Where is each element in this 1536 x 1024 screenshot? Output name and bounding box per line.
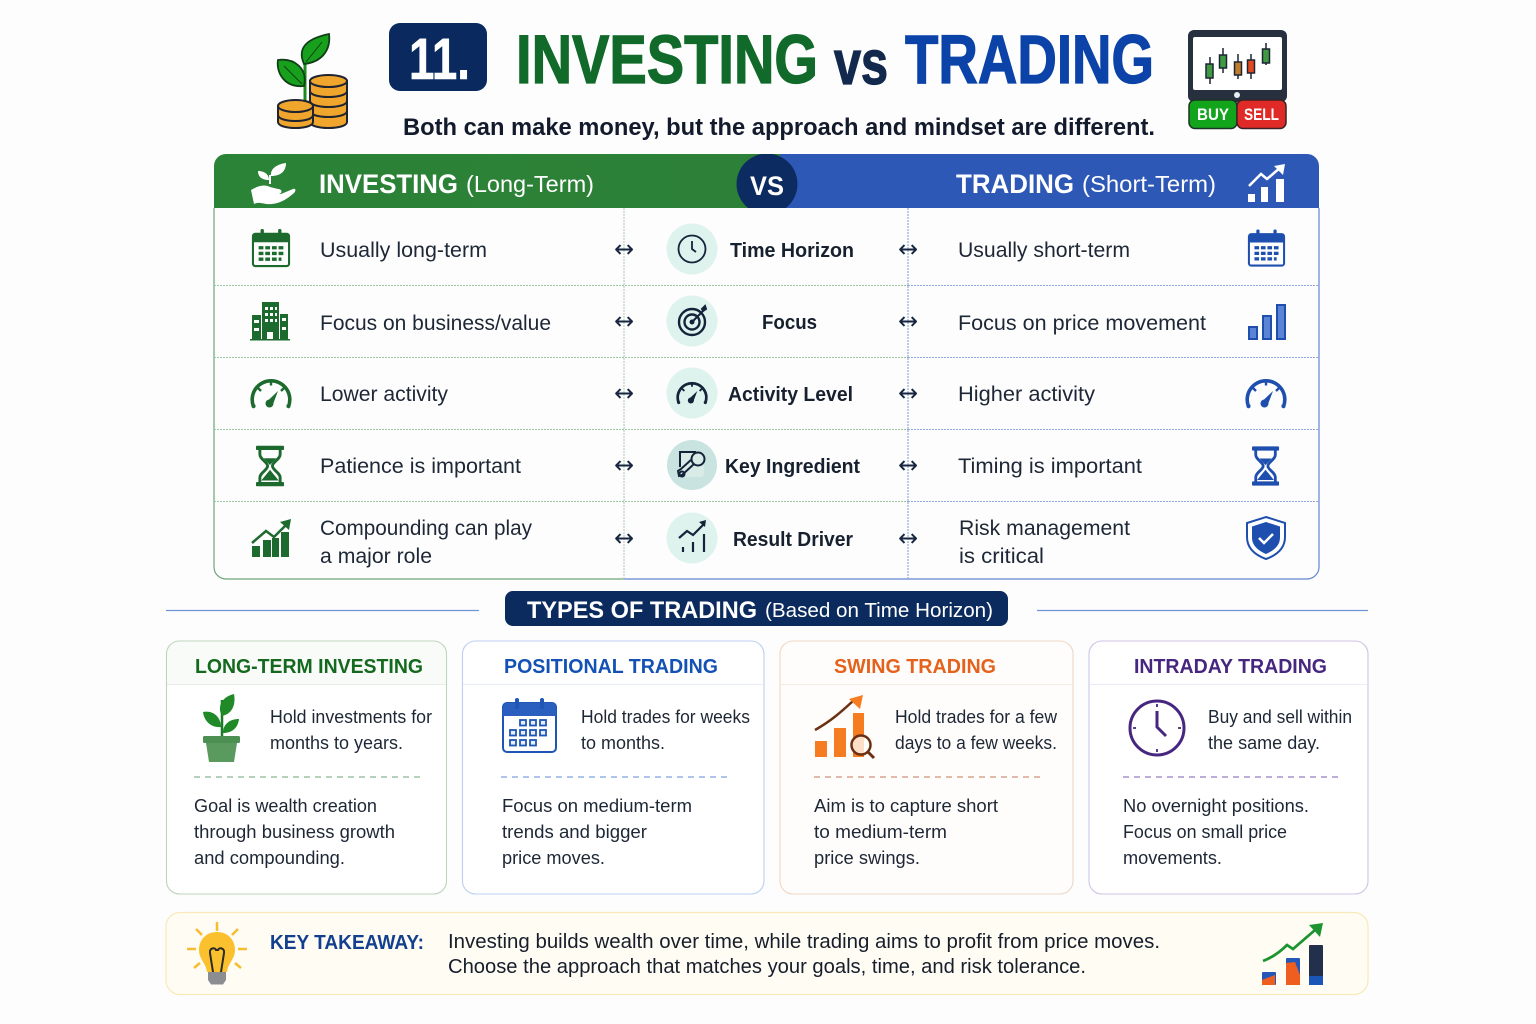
panel: intraday trading: Focus on small price (1123, 822, 1287, 842)
icon: blue gauge (1246, 381, 1286, 408)
table header bar (214, 154, 1319, 208)
row: result driver: a major role (320, 545, 432, 568)
row: focus: Focus on price movement (958, 312, 1206, 335)
row: time horizon: Usually short-term (958, 239, 1130, 262)
row: time horizon: Usually long-term (320, 239, 487, 262)
icon: rising bars (1248, 164, 1285, 202)
row: activity level: Activity Level (728, 383, 853, 406)
panel: key takeaway (166, 912, 1368, 994)
row: key ingredient: Patience is important (320, 455, 521, 478)
icon: office buildings (250, 302, 290, 340)
panel: long-term investing: Hold investments for (270, 707, 432, 727)
header: investing: (Long-Term) (466, 171, 594, 197)
row: key ingredient: Timing is important (958, 455, 1142, 478)
row: time horizon: Time Horizon (730, 239, 854, 262)
icon: purple clock (1130, 701, 1184, 755)
panel: intraday trading: movements. (1123, 848, 1222, 868)
panel: intraday trading (1089, 641, 1368, 894)
title: INVESTING (516, 21, 818, 98)
row: result driver: Risk management (959, 517, 1130, 540)
row: focus: ↔ (898, 307, 918, 335)
panel: long-term investing (166, 641, 446, 894)
row: activity level: Higher activity (958, 383, 1096, 406)
icon: growth chart (1262, 923, 1323, 985)
section heading: types of trading (166, 591, 1368, 626)
panel: key takeaway: Choose the approach that matches your goals, time, and risk tolerance. (448, 956, 1086, 978)
icon: chart in circle (666, 512, 718, 564)
row: result driver: is critical (959, 545, 1044, 568)
row: result driver: Compounding can play (320, 517, 532, 540)
row: result driver: ↔ (898, 524, 918, 552)
subtitle: Both can make money, but the approach and mindset are different. (403, 114, 1155, 141)
comparison table (166, 154, 1368, 994)
table frame (214, 208, 1319, 579)
header: trading (956, 169, 1216, 199)
panel: positional trading: Hold trades for weeks (581, 707, 750, 727)
section heading: types of trading: (Based on Time Horizon) (765, 600, 993, 622)
icon: green chart (252, 519, 291, 557)
panel: long-term investing: Goal is wealth creation (194, 796, 377, 816)
header: trading: (Short-Term) (1082, 171, 1216, 197)
icon: green calendar (253, 229, 289, 266)
row: key ingredient (256, 440, 1279, 490)
icon: potted plant (203, 694, 240, 762)
title: TRADING (905, 21, 1154, 98)
icon: shield (1247, 517, 1285, 559)
icon: green gauge (252, 381, 290, 408)
panel: key takeaway: KEY TAKEAWAY: (270, 932, 424, 954)
title (516, 21, 1154, 98)
icon: blue calendar (1249, 230, 1284, 266)
icon: calendar grid (503, 698, 556, 752)
panel: long-term investing: months to years. (270, 733, 403, 753)
icon: light bulb (187, 922, 247, 984)
panel: intraday trading: INTRADAY TRADING (1134, 655, 1327, 678)
panel: swing trading: SWING TRADING (834, 655, 996, 678)
panel: positional trading: Focus on medium-term (502, 796, 692, 816)
icon: plant and coins (278, 34, 347, 128)
panel: positional trading: to months. (581, 733, 665, 753)
panel: positional trading: trends and bigger (502, 822, 647, 842)
row: activity level: Lower activity (320, 383, 448, 406)
row: result driver (252, 512, 1285, 568)
header: investing (319, 169, 594, 199)
panel: long-term investing: LONG-TERM INVESTING (195, 655, 423, 678)
panel: positional trading (462, 641, 764, 894)
title: vs (834, 29, 888, 98)
panel: intraday trading: No overnight positions. (1123, 796, 1309, 816)
icon: trading screen with buy and sell buttons: SELL (1244, 105, 1279, 124)
icon: trading screen with buy and sell buttons (1188, 30, 1287, 128)
panel: swing trading: to medium-term (814, 822, 947, 842)
row: focus (250, 296, 1285, 346)
icon: blue bars (1249, 305, 1285, 339)
row: focus: ↔ (614, 307, 634, 335)
panel: key takeaway: Investing builds wealth over time, while trading aims to profit from price moves. (448, 931, 1160, 953)
panel: intraday trading: the same day. (1208, 733, 1320, 753)
panel: swing trading: days to a few weeks. (895, 733, 1057, 753)
panel: swing trading: Aim is to capture short (814, 796, 998, 816)
icon: key in circle (667, 440, 717, 490)
icon: target (666, 296, 718, 346)
row: focus: Focus (762, 311, 817, 334)
row: activity level: ↔ (898, 379, 918, 407)
row: time horizon: ↔ (898, 235, 918, 263)
header: trading: TRADING (956, 169, 1074, 199)
row: key ingredient: ↔ (614, 451, 634, 479)
row: key ingredient: Key Ingredient (725, 455, 860, 478)
row: time horizon: ↔ (614, 235, 634, 263)
row: activity level (252, 368, 1286, 418)
icon: trading screen with buy and sell buttons: BUY (1197, 105, 1230, 124)
row: result driver: Result Driver (733, 528, 853, 551)
row: focus: Focus on business/value (320, 312, 551, 335)
panel: long-term investing: through business growth (194, 822, 395, 842)
icon: gauge in circle (666, 368, 718, 418)
icon: hand holding sprout (251, 163, 295, 204)
panel: positional trading: POSITIONAL TRADING (504, 655, 718, 678)
panel: intraday trading: Buy and sell within (1208, 707, 1352, 727)
row: key ingredient: ↔ (898, 451, 918, 479)
panel: swing trading (780, 641, 1073, 894)
header: investing: INVESTING (319, 169, 458, 199)
panel: swing trading: Hold trades for a few (895, 707, 1058, 727)
table header bar: VS (750, 171, 784, 201)
row: result driver: ↔ (614, 524, 634, 552)
row: time horizon (253, 224, 1284, 274)
icon: blue hourglass (1252, 446, 1279, 486)
panel: positional trading: price moves. (502, 848, 605, 868)
panel: swing trading: price swings. (814, 848, 920, 868)
section heading: types of trading: TYPES OF TRADING (527, 597, 757, 624)
row: activity level: ↔ (614, 379, 634, 407)
panel: long-term investing: and compounding. (194, 848, 345, 868)
icon: green hourglass (256, 446, 284, 486)
icon: clock (666, 224, 718, 274)
icon: bars with magnifier (815, 695, 874, 758)
badge: number 11: 11. (409, 27, 470, 92)
